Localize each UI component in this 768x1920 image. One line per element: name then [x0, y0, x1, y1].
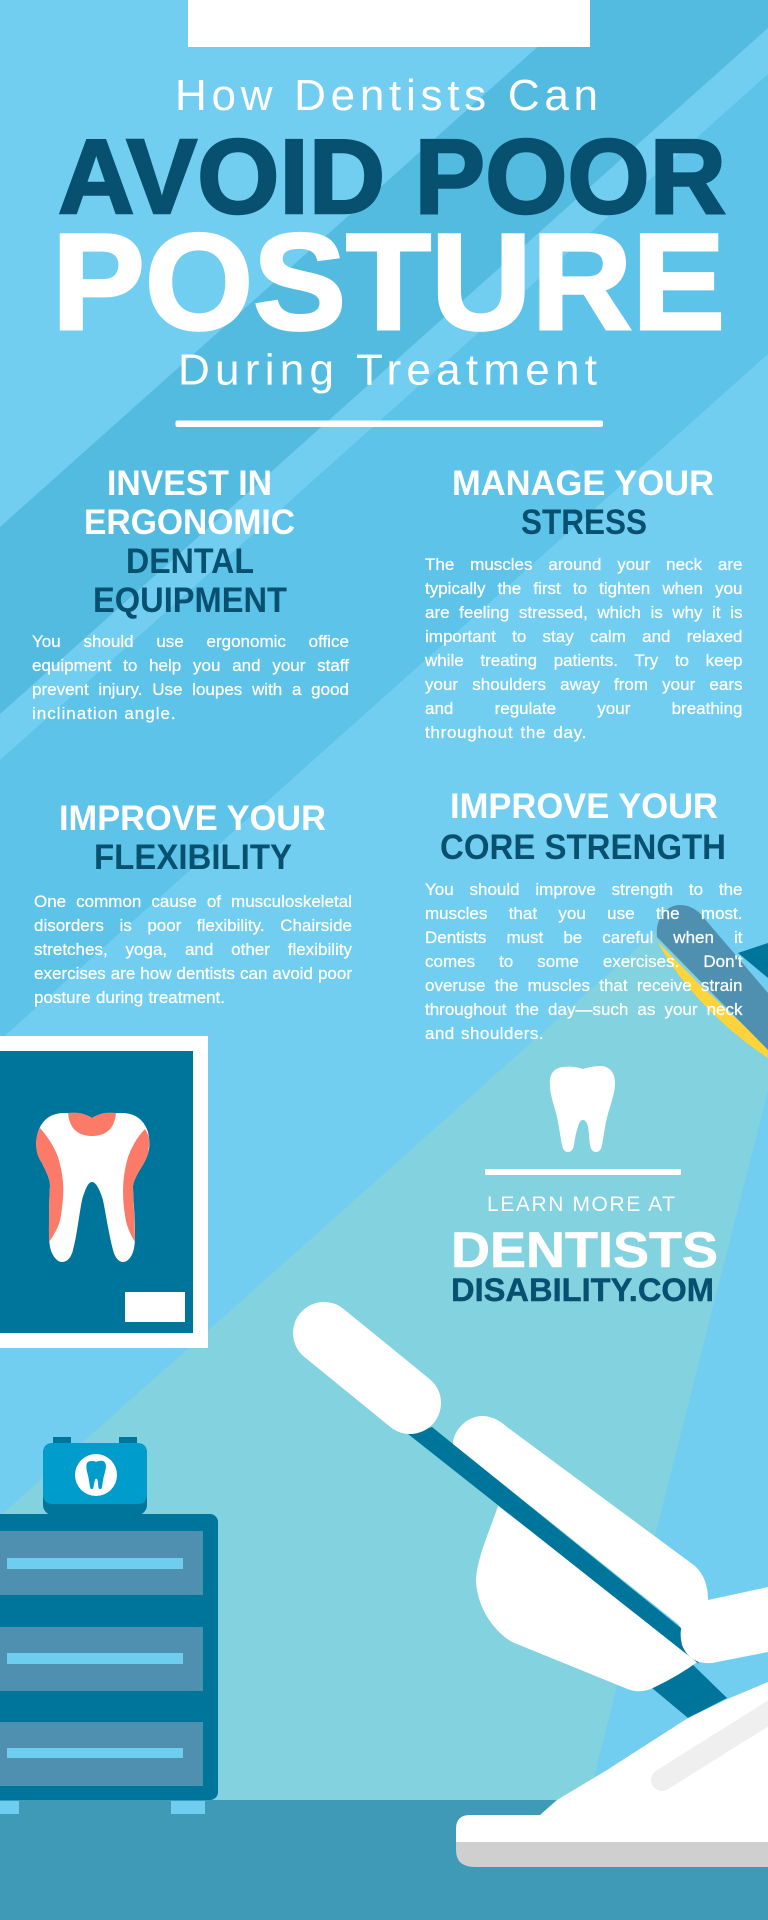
- cabinet: [0, 1514, 218, 1814]
- body text: [32, 632, 350, 723]
- panel: manage your stress: [424, 464, 742, 742]
- heading: invest in ergonomic dental equipment: DENTAL: [126, 542, 254, 581]
- heading: improve your flexibility: IMPROVE YOUR: [59, 799, 326, 838]
- heading: manage your stress: MANAGE YOUR: [452, 464, 714, 503]
- title: How Dentists Can: [175, 71, 598, 120]
- learn more call to action: LEARN MORE AT: [487, 1193, 675, 1216]
- heading: invest in ergonomic dental equipment: ERGONOMIC: [84, 503, 295, 542]
- top white tab: [188, 0, 590, 47]
- body text: are feeling stressed, which is why it is: [425, 603, 742, 622]
- panel: improve your core strength: [425, 787, 743, 1043]
- dental kit box: [43, 1437, 147, 1515]
- learn more call to action: DISABILITY.COM: [451, 1272, 714, 1308]
- body text: [425, 880, 743, 1043]
- heading: manage your stress: STRESS: [521, 503, 647, 542]
- body text: comes to some exercises. Don't: [425, 952, 742, 971]
- body text: disorders is poor flexibility. Chairside: [34, 916, 352, 935]
- body text: typically the first to tighten when you: [425, 579, 742, 598]
- icon: white tooth: [550, 1066, 615, 1152]
- title: POSTURE: [52, 206, 725, 359]
- heading: improve your flexibility: FLEXIBILITY: [94, 838, 292, 877]
- body text: One common cause of musculoskeletal: [34, 892, 352, 911]
- body text: prevent injury. Use loupes with a good: [32, 680, 349, 699]
- body text: exercises are how dentists can avoid poor: [34, 964, 352, 983]
- dental chair: [324, 1333, 768, 1867]
- body text: You should improve strength to the: [425, 880, 742, 899]
- body text: throughout the day.: [425, 723, 587, 742]
- body text: The muscles around your neck are: [425, 555, 742, 574]
- body text: while treating patients. Try to keep: [425, 651, 742, 670]
- body text: your shoulders away from your ears: [425, 675, 742, 694]
- body text: Dentists must be careful when it: [425, 928, 742, 947]
- panel: invest in ergonomic dental equipment: [32, 464, 350, 723]
- learn more divider: [485, 1169, 681, 1175]
- body text: throughout the day—such as your neck: [425, 1000, 742, 1019]
- panel: improve your flexibility: [34, 799, 352, 1007]
- body text: [424, 555, 742, 742]
- lamp light beam: [0, 910, 768, 1800]
- icon: dental lamp: [657, 905, 768, 1058]
- icon: x-ray tooth: [36, 1113, 149, 1262]
- heading: invest in ergonomic dental equipment: INVEST IN: [107, 464, 272, 503]
- heading: invest in ergonomic dental equipment: [84, 464, 295, 620]
- body text: stretches, yoga, and other flexibility: [34, 940, 352, 959]
- title: During Treatment: [178, 346, 597, 394]
- body text: You should use ergonomic office: [32, 632, 349, 651]
- heading: improve your core strength: [440, 787, 726, 867]
- title divider: [176, 420, 603, 427]
- body text: and shoulders.: [425, 1024, 544, 1043]
- learn more call to action: [451, 1193, 718, 1308]
- heading: invest in ergonomic dental equipment: EQUIPMENT: [93, 581, 287, 620]
- title: [52, 71, 726, 394]
- title: AVOID POOR: [58, 118, 726, 236]
- learn more call to action: DENTISTS: [451, 1222, 718, 1278]
- body text: and regulate your breathing: [425, 699, 742, 718]
- body text: important to stay calm and relaxed: [425, 627, 742, 646]
- heading: improve your core strength: IMPROVE YOUR: [450, 787, 718, 826]
- body text: inclination angle.: [32, 704, 177, 723]
- heading: improve your flexibility: [59, 799, 326, 877]
- body text: overuse the muscles that receive strain: [425, 976, 742, 995]
- heading: improve your core strength: CORE STRENGTH: [440, 828, 726, 867]
- heading: manage your stress: [452, 464, 714, 542]
- body text: [34, 892, 352, 1007]
- body text: posture during treatment.: [34, 988, 225, 1007]
- x-ray panel: [0, 1036, 208, 1348]
- body text: muscles that you use the most.: [425, 904, 742, 923]
- body text: equipment to help you and your staff: [32, 656, 349, 675]
- floor: [0, 1800, 768, 1920]
